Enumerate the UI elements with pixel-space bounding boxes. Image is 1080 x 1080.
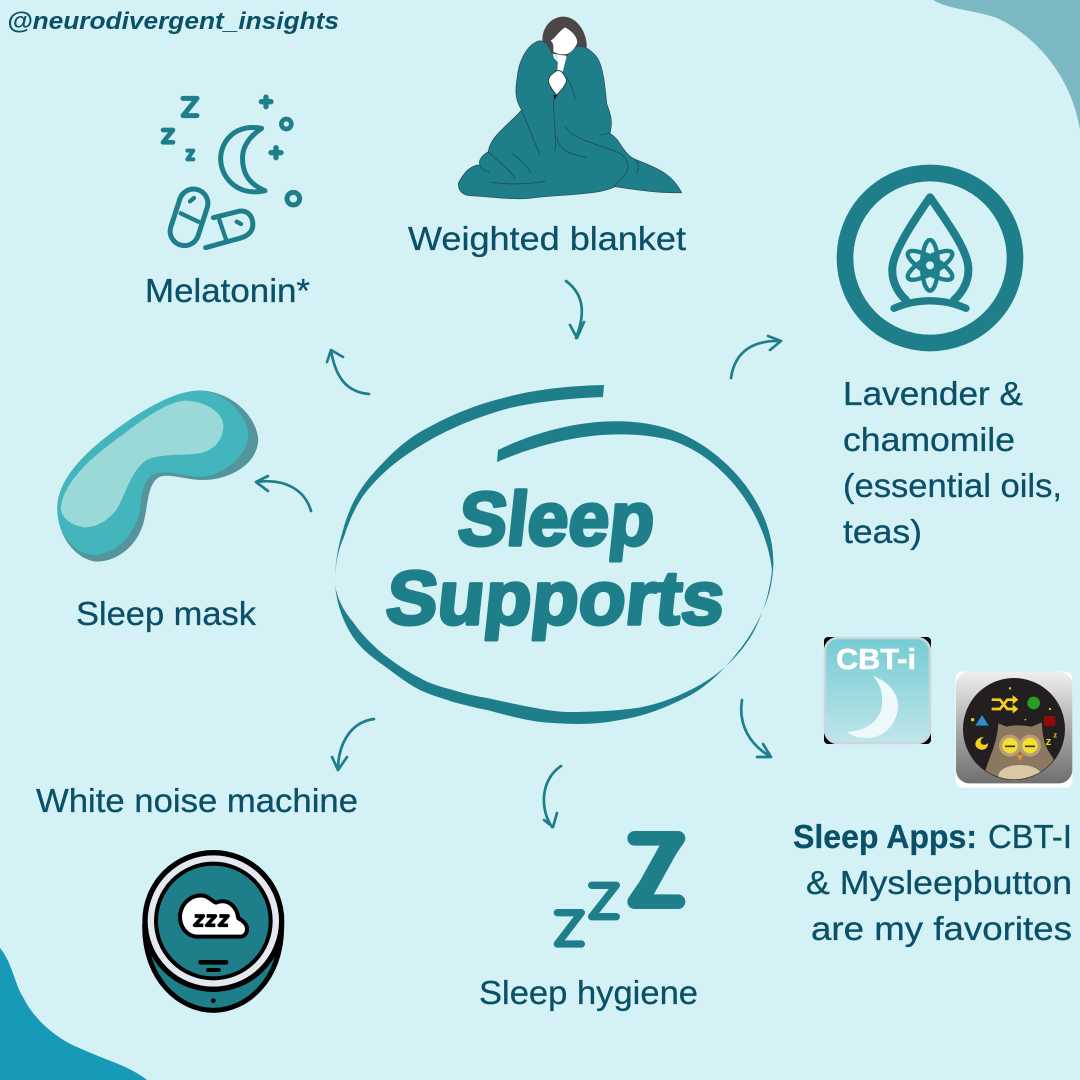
- title: [382, 477, 729, 641]
- corner blob: top right: [933, 0, 1080, 130]
- icon: Mysleepbutton app: [956, 672, 1072, 788]
- arrow: to sleep apps: [741, 700, 771, 757]
- central hand-drawn ring: [335, 385, 773, 724]
- arrow: to sleep hygiene: [544, 766, 561, 827]
- label: lavender and chamomile: (essential oils,: [843, 467, 1062, 504]
- label: lavender and chamomile: teas): [843, 513, 922, 550]
- handle: @neurodivergent_insights: [7, 8, 339, 35]
- label: sleep apps: & Mysleepbutton: [806, 864, 1072, 901]
- title: Supports: [382, 556, 729, 641]
- icon: Mysleepbutton app: z: [1053, 731, 1057, 740]
- label: lavender and chamomile: Lavender &: [843, 375, 1023, 412]
- icon: woman in weighted blanket: [458, 17, 682, 199]
- arrow: to white noise machine: [332, 719, 374, 770]
- label: sleep mask: Sleep mask: [76, 595, 257, 632]
- icon: essential oil drop: [845, 173, 1015, 343]
- label: melatonin: Melatonin*: [145, 272, 310, 309]
- arrow: weighted blanket to centre: [566, 281, 584, 338]
- label: sleep apps: CBT-I: [988, 818, 1072, 855]
- icon: sleep mask: [57, 391, 258, 562]
- arrow: to sleep mask: [256, 476, 311, 511]
- label: lavender and chamomile: chamomile: [843, 421, 1015, 458]
- label: white noise machine: White noise machine: [36, 782, 358, 819]
- icon: zzz: [557, 838, 678, 944]
- arrow: to lavender: [731, 336, 781, 378]
- icon: CBT-i app: [824, 637, 931, 744]
- corner blob: bottom left: [0, 948, 147, 1080]
- label: lavender and chamomile: [843, 375, 1062, 550]
- label: sleep apps: are my favorites: [811, 910, 1072, 947]
- icon: Mysleepbutton app: z: [1046, 736, 1052, 748]
- label: sleep apps: [793, 818, 1072, 947]
- icon: CBT-i app: CBT-i: [836, 644, 916, 676]
- arrow: to melatonin: [327, 350, 369, 394]
- title: Sleep: [454, 477, 659, 562]
- icon: melatonin pills and moon: [163, 97, 300, 249]
- label: sleep hygiene: Sleep hygiene: [479, 974, 698, 1011]
- label: sleep apps: Sleep Apps:: [793, 818, 977, 855]
- label: weighted blanket: Weighted blanket: [408, 220, 686, 257]
- icon: white noise machine: [145, 853, 282, 1010]
